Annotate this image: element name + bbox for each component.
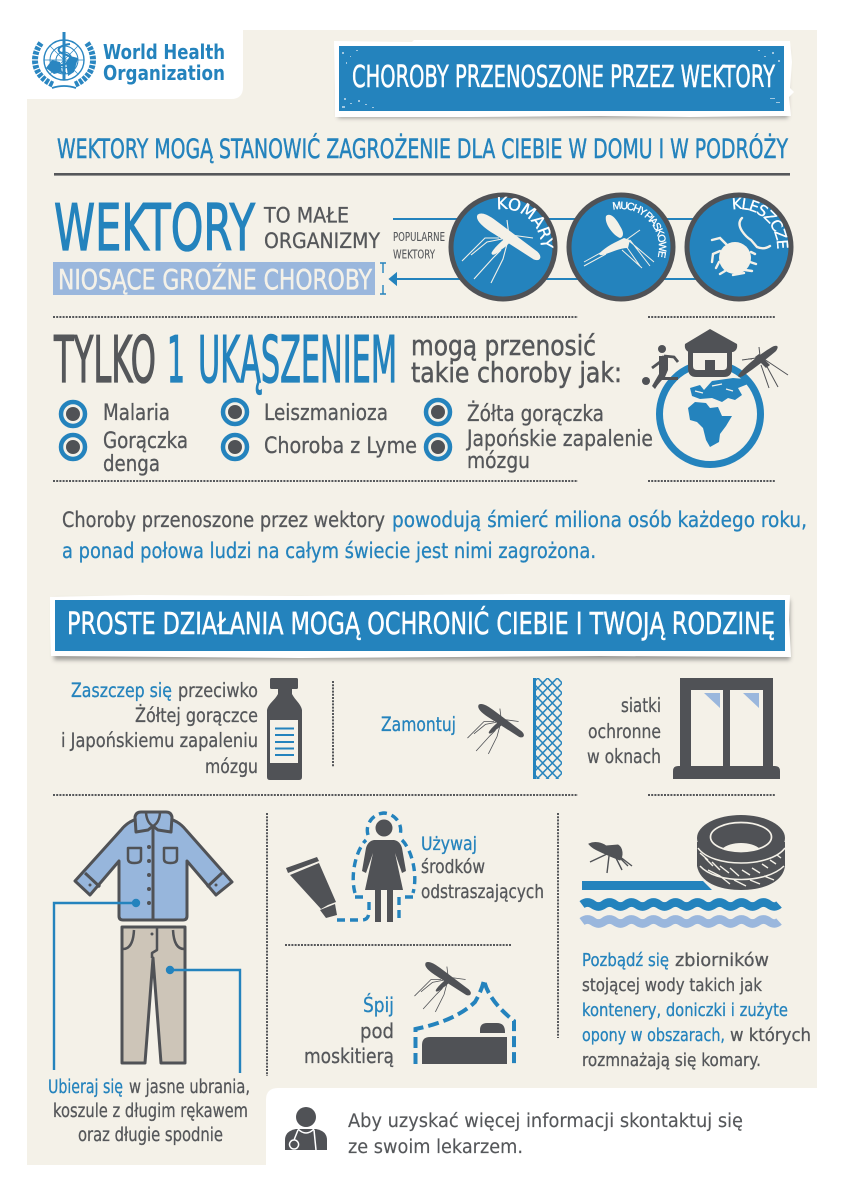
- callout lines: [54, 903, 240, 1073]
- disease list: denga: [103, 452, 160, 477]
- tip: window screens: Zamontuj: [381, 713, 456, 736]
- tip: mosquito net: [304, 962, 514, 1068]
- logo: World Health Organization: World Health: [103, 40, 225, 64]
- definition: wektory to małe organizmy: NIOSĄCE GROŹNE CHOROBY: [58, 262, 373, 296]
- icon: globe with house, runner and mosquito: [642, 329, 788, 464]
- tip: window screens: siatki: [621, 694, 661, 717]
- tip: repellents: [286, 813, 544, 922]
- bullet: denga: [61, 435, 85, 459]
- contact footer panel: Aby uzyskać więcej informacji skontaktuj się: [348, 1111, 743, 1132]
- repellent dashed outline: [337, 813, 415, 920]
- contact footer panel: [266, 1088, 842, 1191]
- tip: standing water: kontenery, doniczki i zużyte: [582, 1000, 788, 1021]
- tip: window screens: [381, 678, 780, 779]
- icon: window: [673, 678, 780, 779]
- tip: vaccination: Zaszczep się: [71, 679, 172, 702]
- tip: window screens: w oknach: [587, 745, 661, 768]
- tip: light clothing: [48, 812, 250, 1146]
- bullet: lyme: [223, 435, 247, 459]
- dotted dividers: [53, 317, 775, 1076]
- tip: mosquito net: Śpij: [363, 993, 394, 1017]
- icon: mosquito: [467, 704, 524, 754]
- bullet: żółta gorączka: [426, 400, 450, 424]
- runner: [642, 345, 678, 389]
- label: popularne wektory: POPULARNE: [393, 229, 445, 244]
- icon: muchy piaskowe circle: [566, 192, 676, 302]
- tip: standing water: w których: [730, 1025, 811, 1046]
- icon: woman: [362, 820, 406, 922]
- heading: tylko 1 ukąszeniem: TYLKO: [53, 324, 156, 398]
- statement paragraph: Choroby przenoszone przez wektory: [62, 508, 385, 532]
- tip: window screens: ochronne: [588, 720, 661, 743]
- icon: mosquito: [414, 962, 471, 1012]
- label: popularne wektory: [393, 229, 445, 262]
- tip: light clothing: w jasne ubrania,: [129, 1077, 250, 1098]
- tip: light clothing: koszule z długim rękawem: [53, 1101, 248, 1122]
- bullet: malaria: [61, 402, 85, 426]
- contact footer panel: ze swoim lekarzem.: [348, 1137, 523, 1158]
- definition: wektory to małe organizmy: TO MAŁE: [263, 204, 349, 228]
- tip: light clothing: oraz długie spodnie: [78, 1125, 223, 1146]
- tip: repellents: odstraszających: [421, 881, 544, 903]
- tip: repellents: Używaj: [421, 833, 477, 855]
- definition: wektory to małe organizmy: WEKTORY: [54, 192, 256, 266]
- icon: komary circle: KOMARY: [498, 196, 554, 248]
- tip: standing water: [582, 815, 811, 1071]
- tip: vaccination: mózgu: [205, 755, 258, 778]
- tip: standing water: stojącej wody takich jak: [582, 975, 762, 996]
- label: popularne wektory: WEKTORY: [393, 246, 435, 262]
- tip: standing water: opony w obszarach,: [582, 1025, 725, 1046]
- tip: standing water: zbiorników: [675, 950, 769, 971]
- tip: vaccination: Żółtej gorączce: [135, 704, 258, 727]
- heading: tylko 1 ukąszeniem: mogą przenosić: [411, 329, 596, 362]
- bed net: [416, 980, 514, 1064]
- disease list: mózgu: [467, 449, 530, 474]
- icon: bed: [422, 1023, 507, 1064]
- definition: wektory to małe organizmy: ORGANIZMY: [264, 229, 380, 253]
- disease list: Choroba z Lyme: [264, 434, 417, 459]
- statement paragraph: [62, 508, 807, 563]
- header banner: [334, 40, 794, 118]
- disease list: Japońskie zapalenie: [465, 427, 653, 452]
- decorative wear: [342, 50, 780, 108]
- tip: vaccination: przeciwko: [178, 679, 258, 702]
- tip: vaccination: [61, 678, 302, 780]
- heading: tylko 1 ukąszeniem: takie choroby jak:: [411, 356, 622, 389]
- disease list: Malaria: [103, 401, 170, 426]
- disease list: [61, 400, 653, 477]
- bullet: leiszmanioza: [223, 400, 247, 424]
- bracket and arrow lines: [380, 219, 700, 294]
- icon: tyre: [697, 815, 785, 890]
- house: [685, 329, 737, 377]
- icon: WHO emblem: [35, 32, 93, 88]
- icon: kleszcze circle: [684, 192, 794, 302]
- bullet: japońskie zapalenie: [426, 435, 450, 459]
- heading: tylko 1 ukąszeniem: 1: [167, 324, 185, 398]
- tip: standing water: Pozbądź się: [582, 950, 669, 971]
- icon: shirt: [75, 812, 232, 920]
- logo: World Health Organization: [27, 30, 243, 99]
- tip: repellents: środków: [421, 856, 485, 878]
- tip: standing water: rozmnażają się komary.: [582, 1050, 761, 1071]
- statement paragraph: a ponad połowa ludzi na całym świecie jest nimi zagrożona.: [62, 539, 596, 563]
- tip: light clothing: Ubieraj się: [48, 1077, 123, 1098]
- disease list: Leiszmanioza: [264, 401, 388, 426]
- section banner: [50, 594, 791, 660]
- tip: mosquito net: moskitierą: [304, 1044, 394, 1068]
- tip: vaccination: i Japońskiemu zapaleniu: [61, 729, 258, 752]
- tip: mosquito net: pod: [360, 1019, 394, 1043]
- icon: tube: [286, 857, 337, 918]
- icon: net: [533, 678, 562, 779]
- disease list: Żółta gorączka: [467, 401, 604, 427]
- mosquito: [738, 346, 788, 388]
- disease list: Gorączka: [103, 429, 188, 454]
- logo: World Health Organization: Organization: [103, 61, 225, 85]
- heading: tylko 1 ukąszeniem: UKĄSZENIEM: [198, 324, 397, 398]
- icon: muchy piaskowe circle: MUCHY PIASKOWE: [612, 201, 666, 258]
- icon: mosquito profile: [589, 843, 632, 873]
- icon: kleszcze circle: KLESZCZE: [732, 198, 788, 249]
- icon: trousers: [122, 927, 185, 1063]
- icon: doctor: [285, 1107, 327, 1150]
- definition: wektory to małe organizmy: [53, 192, 380, 296]
- icon: vaccine bottle: [267, 678, 302, 780]
- icon: komary circle: [448, 192, 558, 302]
- icon: water: [582, 881, 779, 924]
